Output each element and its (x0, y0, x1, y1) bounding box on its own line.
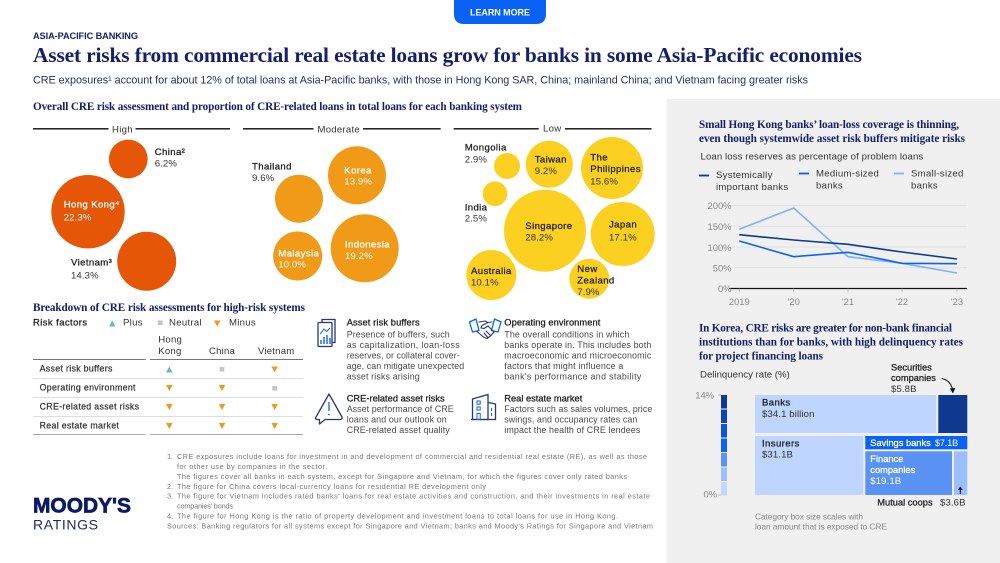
bubble: Vietnam: Vietnam³ (71, 258, 112, 269)
box: banks: $34.1 billion (762, 409, 815, 420)
text block: real estate market: Factors such as sales volumes, price (504, 404, 652, 414)
scale bar: delinquency: 0% (703, 488, 717, 500)
legend: risk factors (33, 316, 256, 328)
row: real estate market (40, 420, 278, 430)
text block: operating environment: banks operate in. This includes both (504, 340, 651, 350)
text block: asset risk buffers: Asset risk buffers (347, 317, 420, 327)
legend: risk factors: Plus (123, 318, 143, 328)
box: finance companies (865, 451, 952, 495)
chart subtitle: Loan loss reserves as percentage of problem loans (700, 151, 924, 162)
footnotes: for other use by companies in the sector. (177, 462, 327, 471)
axis labels: 2019 (729, 296, 750, 307)
logo: Moody's Ratings: MOODY'S (33, 494, 131, 518)
axis labels: 150% (708, 221, 732, 232)
panel: high risk bubbles (33, 125, 230, 291)
box: finance companies: $19.1B (870, 476, 901, 487)
bubble: Australia: Australia (471, 266, 512, 277)
text block: asset risk buffers (347, 317, 464, 382)
text block: operating environment: factors that might influence a (504, 361, 623, 371)
footnotes: The figure for China covers local-currency loans for residential RE development only (177, 482, 486, 491)
panel: right sidebar (666, 99, 1000, 563)
footnotes: The figure for Hong Kong is the ratio of property development and investment loans to total loans for use in Hong Kong. (177, 512, 618, 520)
text block: operating environment (504, 317, 652, 382)
text block: CRE-related asset risks: CRE-related asset risks (347, 393, 445, 403)
table: risk assessments: Hong (158, 335, 182, 346)
bubble: Vietnam (71, 232, 176, 291)
table: risk assessments (33, 335, 303, 435)
footnotes: companies' bonds (177, 502, 233, 510)
subtitle: CRE exposures¹ account for about 12% of total loans at Asia-Pacific banks, with those in Hong Kong SAR, China; mainland China; and Vietnam facing greater risks (33, 74, 809, 86)
bubble: Mongolia: Mongolia (465, 143, 507, 154)
box: securities companies (938, 395, 967, 433)
axis labels: '22 (896, 296, 908, 307)
footnotes: 4. (167, 512, 173, 520)
row: operating environment (40, 382, 277, 392)
icon: alert (315, 394, 342, 424)
text block: operating environment: bank's performance and stability (504, 372, 642, 382)
bubble: New Zealand (569, 259, 615, 299)
bubble: India: India (465, 203, 488, 214)
panel: low risk bubbles (454, 124, 655, 300)
bubble: Japan: 17.1% (609, 233, 637, 244)
text block: real estate market (504, 393, 652, 435)
legend: bank sizes: important banks (716, 182, 788, 193)
box: insurers: Insurers (762, 438, 800, 449)
bubble: Thailand: Thailand (252, 161, 292, 172)
box: finance companies: Finance (870, 454, 903, 464)
axis labels: 50% (713, 262, 732, 274)
icon: chart document (318, 320, 335, 346)
bubble: Korea (328, 146, 386, 204)
heading: Hong Kong coverage: even though systemwide asset risk buffers mitigate risks (699, 133, 966, 145)
table: risk assessments: Vietnam (258, 346, 294, 357)
bubble: Malaysia (273, 232, 322, 280)
bubble: Thailand (252, 161, 323, 223)
box: finance companies: companies (870, 465, 916, 475)
heading: Korea: institutions than for banks, with high delinquency rates (699, 337, 964, 349)
box: banks (755, 395, 936, 433)
heading: Korea: In Korea, CRE risks are greater for non-bank financial (699, 323, 952, 335)
row: asset risk buffers: Asset risk buffers (40, 364, 113, 374)
box: mutual coops (954, 451, 967, 495)
box: savings banks: Savings banks (870, 438, 931, 448)
footnotes: Sources: Banking regulators for all systems except for Singapore and Vietnam; banks and Moody's Ratings for Singapore and Vietnam (167, 522, 653, 530)
bubble: New Zealand: New (577, 264, 598, 275)
footnotes: 3. (167, 492, 173, 500)
footnotes: 2. (167, 482, 173, 491)
text block: CRE-related asset risks: CRE-related asset quality (347, 425, 450, 435)
axis labels: 100% (708, 242, 732, 253)
legend: bank sizes: Small-sized (911, 169, 964, 180)
bubble: Australia: 10.1% (471, 278, 499, 289)
row: asset risk buffers (40, 364, 278, 374)
bubble: China: 6.2% (155, 159, 177, 170)
line: systemically important banks (739, 235, 957, 259)
bubble: India (465, 181, 507, 225)
label: mutual coops: $3.6B (940, 498, 966, 509)
text block: real estate market: swings, and occupancy rates can (504, 415, 637, 425)
heading: Hong Kong coverage (699, 119, 966, 145)
table: risk assessments: China (209, 346, 236, 357)
text block: asset risk buffers: age, can mitigate unexpected (347, 361, 464, 371)
bubble: Australia (466, 250, 516, 300)
footnotes: The figures cover all banks in each system, except for Singapore and Vietnam, for which the figures cover only rated banks (177, 472, 627, 481)
note: box size: Category box size scales with (755, 511, 863, 521)
axis labels: 0% (718, 283, 732, 294)
bubble: Taiwan (526, 141, 573, 188)
legend: bank sizes: banks (816, 180, 843, 192)
legend: bank sizes: Medium-sized (816, 169, 879, 180)
bubble: Malaysia: Malaysia (278, 248, 319, 259)
bubble: Hong Kong (51, 175, 125, 248)
bubble: Korea: 13.9% (344, 177, 372, 188)
legend: risk factors: Neutral (169, 318, 202, 328)
bubble: Hong Kong: Hong Kong⁴ (64, 200, 120, 211)
axis labels: '20 (788, 296, 800, 307)
scale bar: delinquency (695, 390, 727, 500)
label: securities companies: companies (891, 373, 936, 383)
heading: Korea (699, 323, 964, 363)
row: operating environment: Operating environment (40, 382, 136, 392)
note: box size: loan amount that is exposed to CRE (755, 521, 887, 531)
line: medium-sized banks (739, 241, 957, 264)
bubble: Japan: Japan (609, 220, 637, 231)
text block: operating environment: The overall conditions in which (504, 329, 629, 339)
bubble: Indonesia: 19.2% (345, 251, 373, 262)
bubble: The Philippines: The (590, 153, 608, 164)
bubble: Indonesia (331, 214, 399, 282)
icon: handshake (470, 319, 501, 338)
bubble: The Philippines (581, 137, 643, 199)
icon: buildings (471, 394, 496, 420)
axis labels: '21 (842, 296, 854, 307)
text block: asset risk buffers: reserves, or collateral cover- (347, 350, 460, 360)
bubble: China (109, 140, 186, 178)
bubble: The Philippines: 15.6% (590, 177, 618, 188)
bubble: New Zealand: 7.9% (577, 287, 600, 298)
text block: real estate market: impact the health of CRE lendees (504, 425, 641, 435)
bubble: Singapore: 28.2% (525, 233, 553, 244)
heading: breakdown: Breakdown of CRE risk assessments for high-risk systems (33, 302, 306, 314)
bubble: Vietnam: 14.3% (71, 271, 99, 282)
bubble: Singapore (504, 190, 586, 272)
bubble: Mongolia (465, 143, 520, 179)
text block: CRE-related asset risks: loans and our outlook on (347, 415, 447, 425)
box: savings banks: $7.1B (935, 438, 958, 448)
text block: real estate market: Real estate market (504, 393, 583, 403)
box: banks: Banks (762, 398, 791, 409)
delinquency label: Delinquency rate (%) (700, 369, 790, 380)
bubble: Mongolia: 2.9% (465, 154, 487, 165)
row: real estate market: Real estate market (40, 420, 119, 430)
text block: asset risk buffers: as capitalization, loan-loss (347, 340, 460, 350)
legend: bank sizes: banks (911, 180, 938, 192)
logo: Moody's Ratings: RATINGS (33, 516, 98, 532)
bubble: Thailand: 9.6% (252, 173, 275, 184)
logo: Moody's Ratings (33, 494, 131, 532)
bubble: Korea: Korea (344, 165, 372, 176)
kicker: ASIA-PACIFIC BANKING (33, 31, 138, 41)
bubble: India: 2.5% (465, 214, 487, 225)
legend: bank sizes: Systemically (716, 170, 773, 181)
note: box size (755, 511, 887, 531)
bubble: Taiwan: 9.2% (535, 166, 557, 177)
header: high: High (112, 125, 133, 136)
bubble: The Philippines: Philippines (590, 164, 641, 175)
text block: CRE-related asset risks (347, 393, 454, 435)
text block: asset risk buffers: asset risks arising (347, 372, 420, 382)
footnotes (167, 452, 653, 530)
bubble: Malaysia: 10.0% (278, 260, 306, 271)
line chart: loan loss reserves (708, 200, 967, 307)
text block: CRE-related asset risks: Asset performance of CRE (347, 404, 454, 414)
button: learn more: LEARN MORE (470, 8, 530, 18)
header: low: Low (543, 124, 561, 134)
scale bar: delinquency: 14% (695, 390, 714, 400)
label: securities companies (891, 362, 955, 395)
legend: bank sizes (699, 169, 964, 193)
title: Asset risks from commercial real estate loans grow for banks in some Asia-Pacific economies (33, 43, 862, 67)
heading: Korea: for project financing loans (699, 351, 824, 363)
footnotes: 1. (167, 452, 173, 461)
row: CRE-related asset risks (40, 402, 278, 412)
header: moderate: Moderate (318, 125, 360, 136)
bubble: New Zealand: Zealand (577, 275, 615, 286)
row: CRE-related asset risks: CRE-related asset risks (40, 402, 140, 412)
text block: asset risk buffers: Presence of buffers, such (347, 329, 450, 339)
table: risk assessments: Kong (158, 346, 182, 357)
legend: risk factors: Risk factors (33, 316, 87, 328)
treemap: CRE exposure (755, 395, 967, 495)
label: securities companies: $5.8B (891, 384, 917, 395)
bubble: Singapore: Singapore (525, 221, 572, 232)
legend: risk factors: Minus (229, 318, 256, 328)
axis labels: 200% (708, 200, 732, 211)
footnotes: CRE exposures include loans for investment in and development of commercial and residential real estate (RE), as well as those (177, 452, 647, 461)
footnotes: The figure for Vietnam includes rated banks' loans for real estate activities and construction, and their investments in real estate (177, 492, 650, 500)
box: insurers (755, 436, 863, 495)
box: savings banks (865, 436, 967, 449)
box: insurers: $31.1B (762, 450, 793, 460)
button: learn more (454, 0, 546, 24)
label: mutual coops: Mutual coops (877, 498, 933, 508)
bubble: Japan (591, 202, 655, 266)
panel: moderate risk bubbles (243, 125, 441, 282)
line: small-sized banks (739, 208, 957, 273)
text block: operating environment: macroeconomic and microeconomic (504, 350, 652, 360)
bubble: China: China² (155, 147, 186, 158)
heading: overall assessment: Overall CRE risk assessment and proportion of CRE-related loans in total loans for each banking system (33, 101, 523, 113)
label: mutual coops (877, 486, 966, 509)
bubble: Taiwan: Taiwan (535, 155, 567, 166)
axis labels (708, 200, 963, 307)
bubble: Indonesia: Indonesia (345, 240, 390, 251)
axis labels: '23 (951, 296, 963, 307)
heading: Hong Kong coverage: Small Hong Kong banks’ loan-loss coverage is thinning, (699, 119, 959, 131)
bubble: Hong Kong: 22.3% (64, 213, 92, 224)
text block: operating environment: Operating environment (504, 317, 601, 327)
label: securities companies: Securities (891, 362, 932, 372)
